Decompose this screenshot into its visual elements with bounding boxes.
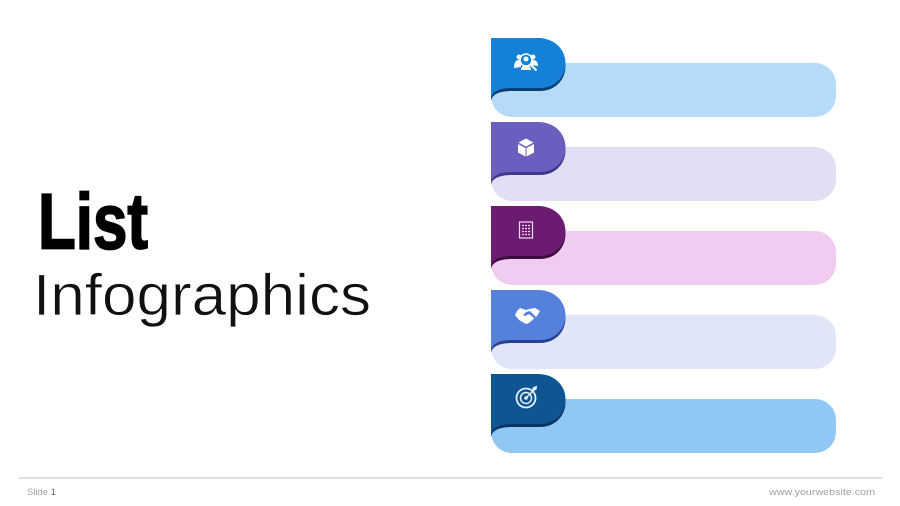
list item 3 (491, 206, 836, 285)
title: List: List (38, 176, 148, 266)
list item 2 (491, 122, 836, 201)
tab 1 (491, 38, 566, 101)
tab 2 (491, 122, 566, 185)
bar 2 (491, 147, 836, 201)
list item 1 (491, 38, 836, 117)
footer: slide number: Slide 1 (27, 487, 56, 498)
icon: target (516, 386, 536, 408)
bar 4 (491, 315, 836, 369)
icon: people search (514, 54, 538, 70)
tab 3 (491, 206, 566, 269)
icon: box (518, 138, 534, 156)
bar 5 (491, 399, 836, 453)
icon: checklist document (520, 222, 532, 238)
bar 3 (491, 231, 836, 285)
tab 5 (491, 374, 566, 437)
footer: website: www.yourwebsite.com (768, 487, 875, 498)
tab 4 (491, 290, 566, 353)
subtitle: Infographics: Infographics (33, 263, 371, 328)
bar 1 (491, 63, 836, 117)
list item 5 (491, 374, 836, 453)
list item 4 (491, 290, 836, 369)
icon: handshake (515, 308, 540, 324)
